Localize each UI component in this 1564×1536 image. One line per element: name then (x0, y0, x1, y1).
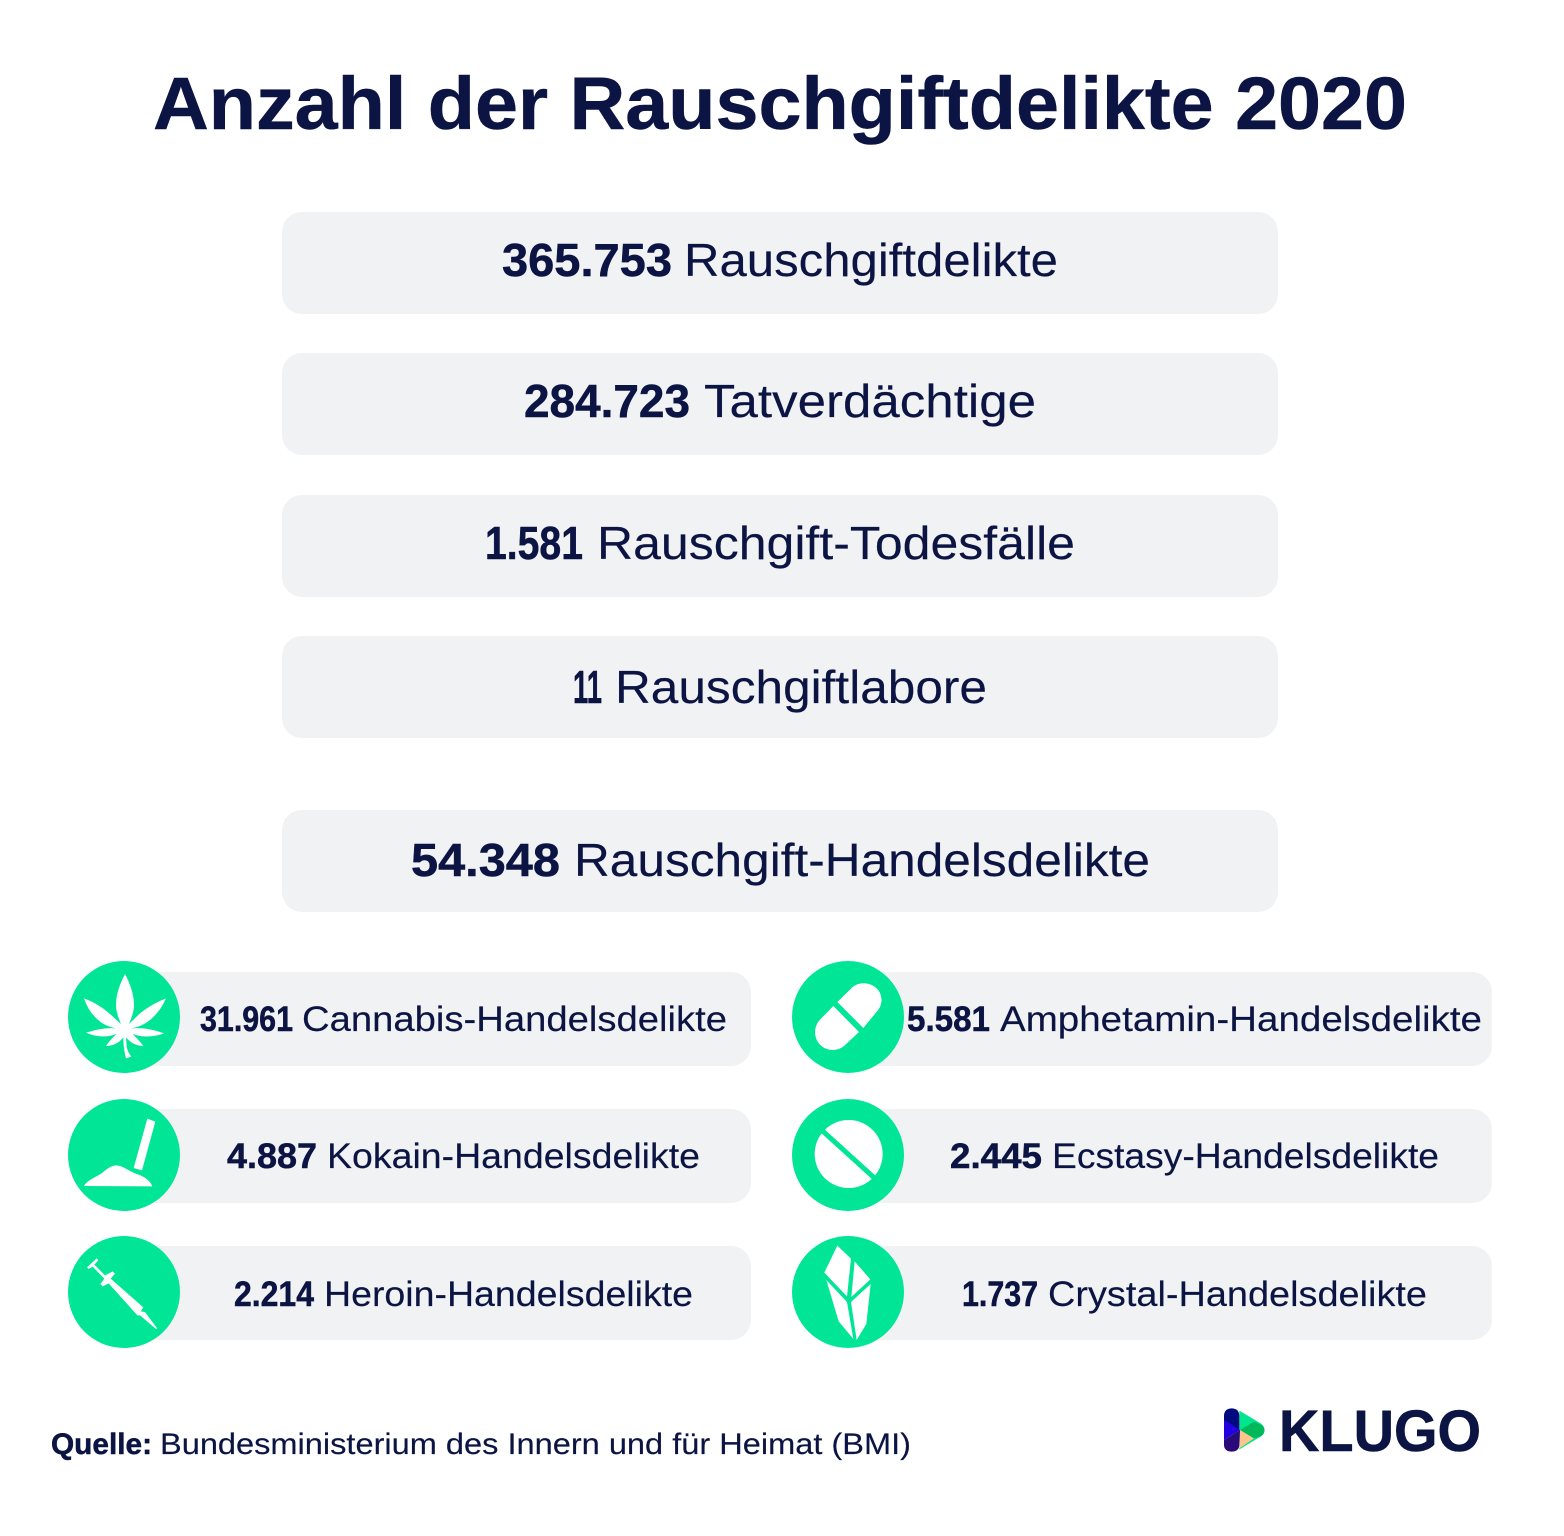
source note: Bundesministerium des Innern und für Heimat (BMI) (160, 1428, 911, 1461)
panel: amphetamine: 5.581 (907, 1000, 990, 1039)
panel: total offences: Rauschgiftdelikte (684, 234, 1058, 286)
icon: cocaine powder and straw (68, 1099, 180, 1211)
panel: suspects: Tatverdächtige (704, 375, 1036, 427)
panel: heroin: Heroin-Handelsdelikte (324, 1275, 693, 1314)
icon: logo play mark (1224, 1408, 1264, 1452)
panel: trafficking offences: 54.348 (411, 834, 560, 886)
panel: ecstasy: 2.445 (950, 1137, 1042, 1176)
panel: cannabis (68, 961, 751, 1073)
panel: crystal (792, 1236, 1492, 1348)
title: Anzahl der Rauschgiftdelikte 2020 (153, 62, 1407, 145)
panel: heroin: 2.214 (234, 1275, 314, 1314)
icon: capsule (792, 961, 904, 1073)
panel: cocaine: 4.887 (227, 1137, 317, 1176)
panel: ecstasy: Ecstasy-Handelsdelikte (1052, 1137, 1439, 1176)
panel: drug labs: 11 (573, 661, 602, 713)
panel: crystal: 1.737 (962, 1275, 1038, 1314)
icon: cannabis leaf (68, 961, 180, 1073)
panel: total offences: 365.753 (502, 234, 672, 286)
panel: drug deaths (282, 495, 1278, 597)
panel: total offences (282, 212, 1278, 314)
panel: amphetamine: Amphetamin-Handelsdelikte (1000, 1000, 1482, 1039)
panel: suspects (282, 353, 1278, 455)
panel: cannabis: Cannabis-Handelsdelikte (302, 1000, 727, 1039)
panel: drug labs: Rauschgiftlabore (615, 661, 987, 713)
icon: crystal shard (792, 1236, 904, 1348)
panel: drug deaths: 1.581 (485, 517, 583, 569)
panel: crystal: Crystal-Handelsdelikte (1048, 1275, 1427, 1314)
panel: cocaine (68, 1099, 751, 1211)
logo: KLUGO: KLUGO (1279, 1399, 1481, 1464)
panel: amphetamine (792, 961, 1492, 1073)
panel: cocaine: Kokain-Handelsdelikte (327, 1137, 700, 1176)
panel: trafficking offences (282, 810, 1278, 912)
panel: trafficking offences: Rauschgift-Handelsdelikte (574, 834, 1150, 886)
panel: drug deaths: Rauschgift-Todesfälle (597, 517, 1075, 569)
panel: cannabis: 31.961 (200, 1000, 293, 1039)
panel: ecstasy (792, 1099, 1492, 1211)
source note: Quelle: (51, 1428, 152, 1461)
icon: syringe (68, 1236, 180, 1348)
panel: suspects: 284.723 (524, 375, 690, 427)
panel: drug labs (282, 636, 1278, 738)
icon: scored tablet (792, 1099, 904, 1211)
panel: heroin (68, 1236, 751, 1348)
